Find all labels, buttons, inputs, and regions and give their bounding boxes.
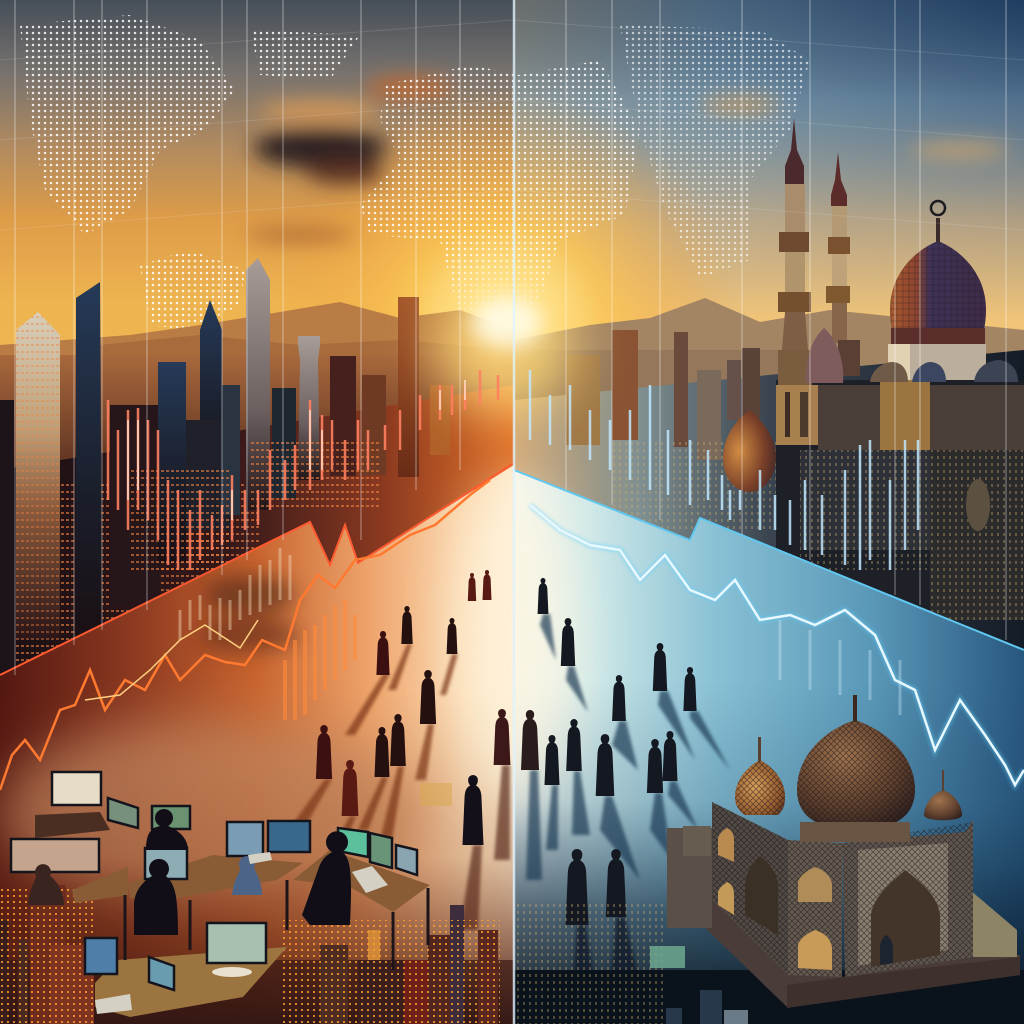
building: dark tower	[76, 282, 102, 640]
left annex	[667, 826, 712, 928]
right floor	[514, 470, 1024, 1024]
person	[401, 606, 413, 644]
monitor	[152, 806, 190, 829]
rust dome	[723, 410, 776, 492]
left lower city	[0, 885, 514, 1024]
monitor	[227, 822, 263, 856]
central glow on floor	[455, 480, 575, 800]
lower palace	[667, 695, 1020, 1008]
inner door	[880, 935, 893, 965]
person	[662, 731, 678, 781]
terrace base	[697, 900, 1020, 1007]
person	[342, 760, 358, 816]
monitor	[207, 923, 266, 963]
lower small arch	[798, 930, 832, 970]
desk legs	[125, 880, 428, 970]
left skyline	[0, 258, 450, 670]
right floor dusk	[514, 680, 1024, 1024]
building: pale tower	[16, 312, 60, 640]
sun low glow	[435, 275, 575, 415]
trader	[28, 864, 64, 905]
monitors	[11, 772, 417, 990]
monitor	[145, 848, 187, 879]
main dome	[797, 695, 915, 842]
monitor	[149, 957, 174, 990]
building: group of towers	[0, 258, 450, 670]
traders	[28, 809, 351, 935]
monitor	[370, 833, 392, 868]
person	[653, 643, 667, 691]
monitor	[108, 798, 138, 828]
right chart: blue spikes	[514, 370, 1024, 650]
left floor	[0, 465, 514, 1024]
mountains	[0, 298, 1024, 470]
left minaret	[778, 118, 812, 385]
base wall	[787, 957, 1020, 1008]
floating left panel	[420, 783, 452, 806]
person	[544, 735, 560, 785]
trader	[134, 859, 178, 935]
person	[612, 675, 626, 721]
monitor	[52, 772, 101, 805]
right dome	[924, 770, 962, 820]
person	[462, 775, 484, 845]
keyboard	[95, 852, 388, 1014]
person	[683, 667, 697, 711]
tower base	[776, 385, 818, 445]
person	[376, 631, 390, 675]
sun core	[471, 296, 543, 348]
terrace right	[970, 890, 1017, 957]
side arch lower	[718, 882, 734, 915]
main blue dome	[890, 241, 986, 344]
left chart: dark reflection	[200, 575, 300, 651]
trader	[146, 809, 188, 850]
monitor	[338, 828, 368, 857]
upper mosque	[723, 118, 1024, 620]
person	[374, 727, 390, 777]
person	[606, 849, 626, 917]
people shadows	[292, 614, 730, 1024]
haze over plain	[0, 355, 514, 475]
crescent finial	[931, 201, 945, 242]
sun glow	[200, 90, 820, 520]
monitor	[11, 839, 99, 872]
right haze	[514, 350, 814, 450]
map: africa continent	[140, 250, 245, 330]
left dome	[735, 737, 785, 815]
mosque body	[776, 380, 1024, 620]
person	[316, 725, 332, 779]
person	[390, 714, 406, 766]
person	[566, 849, 588, 925]
dotted world map	[20, 15, 810, 330]
map: right continent	[620, 25, 810, 278]
trader	[302, 831, 351, 925]
left arch	[745, 856, 778, 935]
side domes	[806, 328, 1018, 383]
person	[561, 618, 575, 666]
person	[596, 734, 614, 796]
left people silhouettes	[316, 570, 510, 845]
upper small arch	[798, 867, 832, 902]
trader	[232, 856, 262, 895]
right skyline	[566, 330, 782, 530]
desk surfaces	[35, 812, 430, 1017]
left low city windows	[0, 480, 260, 675]
monitor	[85, 938, 117, 974]
person	[447, 618, 457, 654]
monitor	[268, 821, 310, 852]
right chart: lower trend line	[530, 505, 1024, 785]
map: central continent	[360, 60, 640, 330]
person	[566, 719, 582, 771]
dome drum	[888, 344, 986, 380]
right city mass	[514, 350, 1024, 650]
left chart line upper	[0, 463, 514, 675]
left sky	[0, 0, 514, 520]
tan lower left	[0, 720, 420, 910]
left chart: red spikes	[0, 370, 514, 675]
person	[468, 573, 476, 601]
person	[538, 578, 548, 614]
person	[420, 670, 436, 724]
clouds	[245, 76, 1010, 241]
right people silhouettes	[521, 578, 697, 925]
person	[521, 710, 539, 770]
right minaret	[826, 152, 860, 376]
right lower city	[514, 900, 1024, 1024]
person	[494, 709, 510, 765]
monitor stand	[212, 967, 252, 977]
trading desks	[11, 772, 430, 1017]
monitor	[396, 845, 417, 875]
left floor dusk	[0, 690, 514, 1024]
side arch upper	[718, 828, 734, 862]
left chart: lower trend line	[0, 480, 490, 790]
person	[482, 570, 492, 600]
main arch	[871, 870, 940, 967]
palace faces	[712, 802, 973, 977]
right sky	[514, 0, 1024, 520]
left city mass	[0, 385, 514, 675]
map: left continents	[20, 15, 360, 235]
person	[647, 739, 663, 793]
